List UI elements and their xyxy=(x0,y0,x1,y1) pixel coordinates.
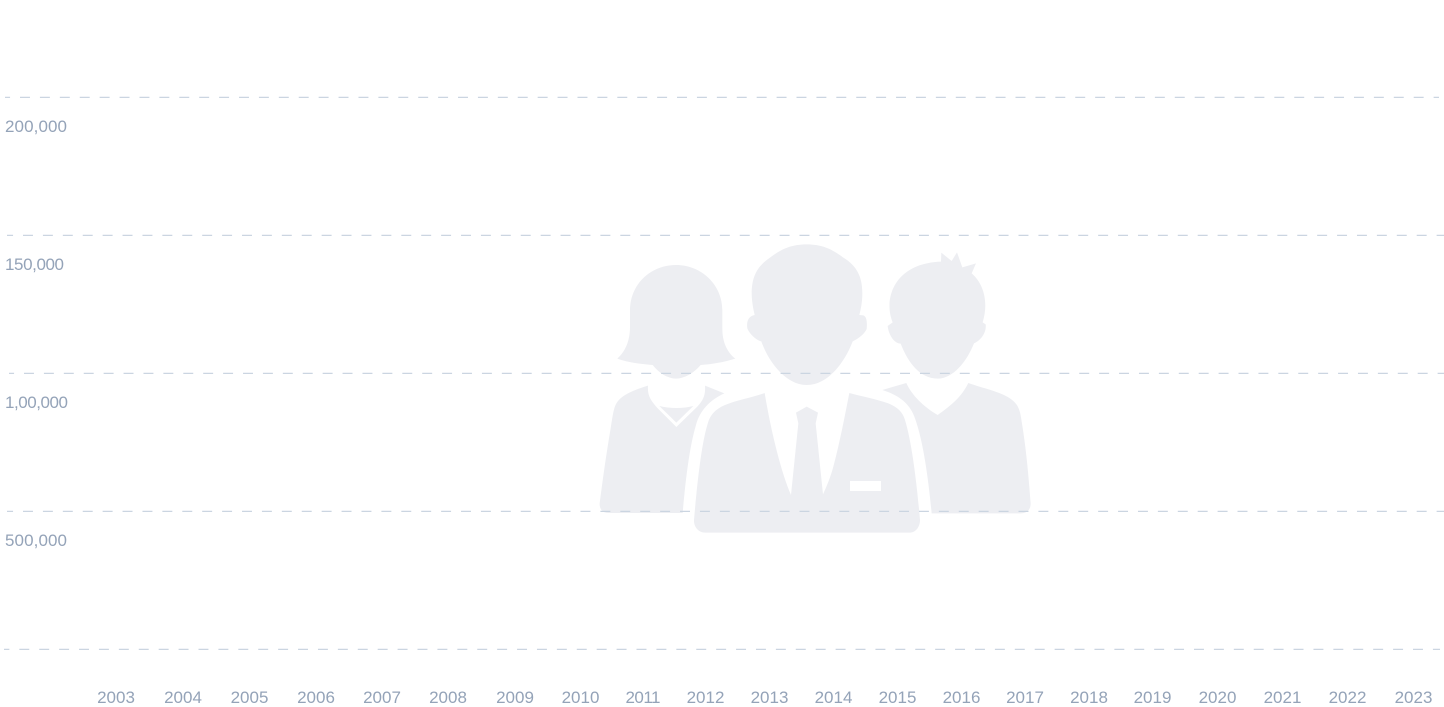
x axis year labels: 2020 xyxy=(1199,688,1236,707)
x axis year labels: 2009 xyxy=(496,688,534,707)
horizontal dashed grid lines xyxy=(4,97,1444,649)
y axis labels xyxy=(5,117,68,550)
x axis year labels: 2011 xyxy=(626,688,660,707)
x axis year labels: 2005 xyxy=(231,688,268,707)
x axis year labels: 2013 xyxy=(751,688,788,707)
x axis year labels: 2019 xyxy=(1134,688,1171,707)
x axis year labels: 2004 xyxy=(164,688,202,707)
x axis year labels: 2015 xyxy=(879,688,916,707)
x axis year labels: 2006 xyxy=(297,688,335,707)
x axis year labels: 2014 xyxy=(815,688,852,707)
y axis labels: 1,00,000 xyxy=(5,393,68,412)
x axis year labels: 2010 xyxy=(562,688,599,707)
x axis year labels: 2012 xyxy=(687,688,724,707)
x axis year labels: 2023 xyxy=(1395,688,1432,707)
x axis year labels xyxy=(97,688,1432,707)
x axis year labels: 2021 xyxy=(1264,688,1301,707)
x axis year labels: 2018 xyxy=(1070,688,1108,707)
icon: three people silhouette xyxy=(600,244,1031,533)
y axis labels: 200,000 xyxy=(5,117,67,136)
x axis year labels: 2016 xyxy=(943,688,980,707)
x axis year labels: 2017 xyxy=(1006,688,1044,707)
x axis year labels: 2022 xyxy=(1329,688,1366,707)
y axis labels: 150,000 xyxy=(5,255,64,274)
icon: boy xyxy=(882,252,1031,513)
x axis year labels: 2007 xyxy=(363,688,401,707)
icon: woman xyxy=(600,265,735,513)
x axis year labels: 2003 xyxy=(97,688,135,707)
icon: man in suit xyxy=(694,244,920,533)
y axis labels: 500,000 xyxy=(5,531,67,550)
x axis year labels: 2008 xyxy=(429,688,467,707)
